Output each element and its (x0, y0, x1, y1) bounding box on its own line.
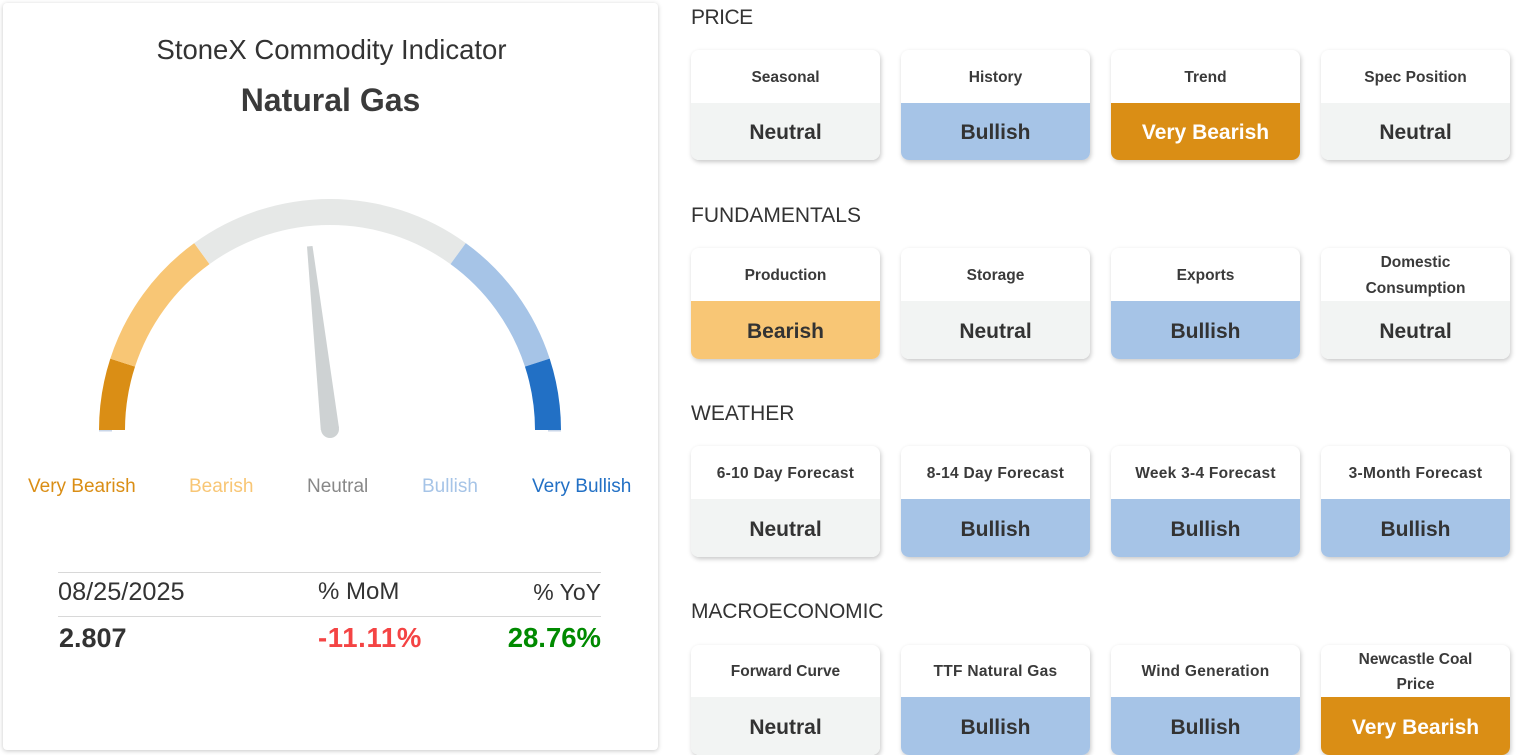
legend label: Very Bearish: Very Bearish (28, 476, 136, 497)
card: Week 3-4 Forecast (1111, 446, 1300, 557)
table header: % YoY: % YoY (533, 579, 601, 605)
card: TTF Natural Gas: Bullish (960, 716, 1030, 738)
gauge segment: very bullish (525, 359, 561, 430)
card: Exports: Exports (1177, 267, 1234, 284)
gauge chart (99, 199, 561, 438)
card: Spec Position: Neutral (1379, 121, 1452, 144)
card: Trend (1111, 50, 1300, 160)
card: Production: Bearish (747, 320, 824, 342)
gauge needle (307, 246, 339, 438)
heading: PRICE: PRICE (691, 6, 753, 29)
card: 3-Month Forecast: 3-Month Forecast (1349, 465, 1482, 482)
card: Seasonal: Neutral (749, 121, 822, 144)
card: Newcastle Coal Price (1321, 645, 1510, 755)
card: Domestic Consumption: Neutral (1379, 320, 1452, 342)
legend label: Bullish: Bullish (422, 476, 478, 497)
card: Forward Curve (691, 645, 880, 755)
heading: MACROECONOMIC: MACROECONOMIC (691, 600, 883, 623)
title: StoneX Commodity Indicator: StoneX Commodity Indicator (156, 34, 507, 65)
card: Trend: Very Bearish (1142, 121, 1269, 144)
card: Spec Position: Spec Position (1364, 69, 1467, 86)
card: Production (691, 248, 880, 359)
value: month over month change: -11.11% (318, 622, 422, 653)
card: Exports: Bullish (1170, 320, 1240, 342)
card: History (901, 50, 1090, 160)
card: 8-14 Day Forecast: 8-14 Day Forecast (927, 465, 1064, 482)
card: Domestic Consumption: Consumption (1366, 280, 1465, 296)
table header: % MoM: % MoM (318, 578, 399, 605)
card: Seasonal (691, 50, 880, 160)
gauge segment: very bearish (99, 359, 135, 430)
card: Production: Production (745, 267, 826, 284)
card: 8-14 Day Forecast (901, 446, 1090, 557)
table header: date: 08/25/2025 (58, 578, 185, 606)
card: Storage: Storage (967, 267, 1024, 284)
heading: Natural Gas: Natural Gas (241, 82, 420, 118)
legend label: Neutral: Neutral (307, 476, 368, 497)
card: Exports (1111, 248, 1300, 359)
card: Week 3-4 Forecast: Week 3-4 Forecast (1135, 465, 1276, 482)
heading: FUNDAMENTALS: FUNDAMENTALS (691, 204, 861, 227)
gauge segment: neutral (194, 199, 466, 264)
card: Wind Generation: Wind Generation (1141, 663, 1270, 680)
heading: WEATHER: WEATHER (691, 402, 794, 425)
card: Storage (901, 248, 1090, 359)
card: 6-10 Day Forecast: 6-10 Day Forecast (717, 465, 854, 482)
card: History: History (969, 69, 1022, 86)
card: Domestic Consumption (1321, 248, 1510, 359)
card: Week 3-4 Forecast: Bullish (1170, 518, 1240, 540)
card: Trend: Trend (1184, 69, 1227, 86)
panel: gauge summary (3, 3, 658, 750)
card: Wind Generation (1111, 645, 1300, 755)
card: Spec Position (1321, 50, 1510, 160)
card: Storage: Neutral (959, 320, 1032, 342)
card: Newcastle Coal Price: Newcastle Coal (1359, 650, 1472, 668)
gauge baseline tick: left (99, 430, 112, 432)
card: Domestic Consumption: Domestic (1381, 254, 1450, 271)
card: 3-Month Forecast (1321, 446, 1510, 557)
legend label: Very Bullish: Very Bullish (532, 476, 631, 497)
card: TTF Natural Gas: TTF Natural Gas (934, 663, 1057, 680)
card: History: Bullish (960, 121, 1030, 144)
card: Newcastle Coal Price: Price (1397, 676, 1434, 693)
card: Forward Curve: Neutral (749, 716, 822, 738)
card: Newcastle Coal Price: Very Bearish (1352, 716, 1479, 738)
card: Seasonal: Seasonal (751, 69, 820, 86)
value: year over year change: 28.76% (508, 622, 601, 653)
card: 6-10 Day Forecast (691, 446, 880, 557)
gauge segment: bullish (450, 243, 550, 367)
card: 8-14 Day Forecast: Bullish (960, 518, 1030, 540)
card: TTF Natural Gas (901, 645, 1090, 755)
card: 3-Month Forecast: Bullish (1380, 518, 1450, 540)
card: Wind Generation: Bullish (1170, 716, 1240, 738)
gauge segment: bearish (110, 243, 210, 367)
card: Forward Curve: Forward Curve (731, 663, 840, 680)
legend label: Bearish: Bearish (189, 476, 253, 497)
card: 6-10 Day Forecast: Neutral (749, 518, 822, 540)
value: price: 2.807 (59, 623, 127, 653)
gauge baseline tick: right (548, 430, 561, 432)
